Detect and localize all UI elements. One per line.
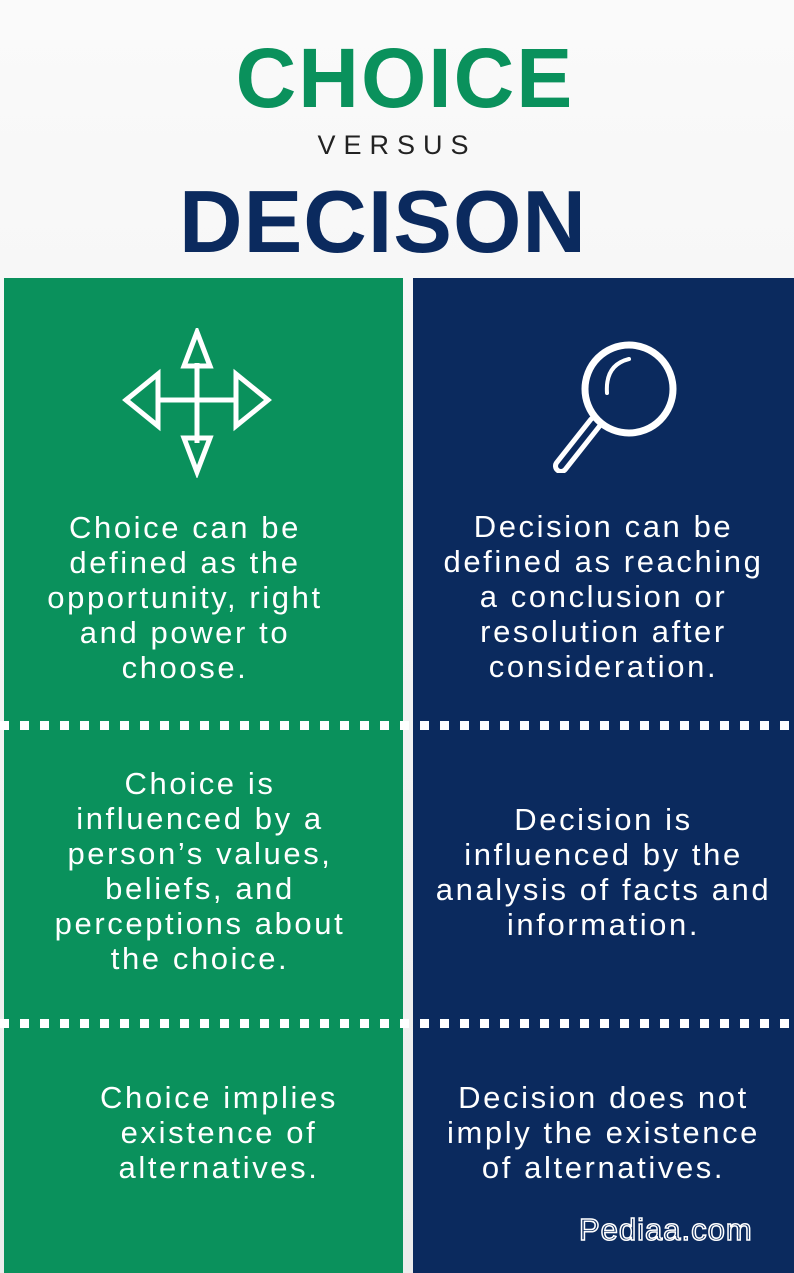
- title: DECISON: DECISON: [179, 172, 587, 271]
- text: choice definition: Choice can be: [69, 510, 301, 545]
- text: decision influence: Decision is: [514, 802, 693, 837]
- text: choice alternatives: Choice implies: [100, 1080, 338, 1115]
- text: decision influence: information.: [507, 907, 700, 942]
- text: choice influence: influenced by a: [76, 801, 324, 836]
- text: decision alternatives: Decision does not: [458, 1080, 749, 1115]
- text: choice definition: defined as the: [69, 545, 301, 580]
- text: decision influence: analysis of facts and: [436, 872, 771, 907]
- text: choice definition: [47, 510, 323, 685]
- text: choice influence: the choice.: [111, 941, 289, 976]
- text: decision definition: [444, 509, 763, 684]
- text: choice influence: Choice is: [125, 766, 275, 801]
- text: decision influence: influenced by the: [464, 837, 743, 872]
- text: decision definition: consideration.: [489, 649, 718, 684]
- logo: Pediaa.com: Pediaa.com: [579, 1212, 753, 1247]
- text: choice influence: [55, 766, 345, 976]
- text: decision alternatives: imply the existence: [447, 1115, 760, 1150]
- icon: magnifying glass: [553, 342, 676, 473]
- subtitle: VERSUS: VERSUS: [317, 130, 477, 160]
- panel: choice: [4, 278, 403, 1273]
- text: decision influence: [436, 802, 771, 942]
- text: decision definition: defined as reaching: [444, 544, 763, 579]
- text: choice influence: perceptions about: [55, 906, 345, 941]
- text: choice alternatives: existence of: [121, 1115, 317, 1150]
- text: decision definition: Decision can be: [474, 509, 733, 544]
- text: decision definition: a conclusion or: [480, 579, 727, 614]
- text: decision definition: resolution after: [480, 614, 727, 649]
- text: choice definition: choose.: [122, 650, 248, 685]
- title: CHOICE: CHOICE: [236, 31, 574, 125]
- text: choice definition: and power to: [80, 615, 290, 650]
- text: choice influence: beliefs, and: [105, 871, 295, 906]
- icon: four arrows: [122, 328, 272, 478]
- text: decision alternatives: [447, 1080, 760, 1185]
- text: choice alternatives: alternatives.: [119, 1150, 319, 1185]
- panel: decision: [413, 278, 794, 1273]
- text: choice alternatives: [100, 1080, 338, 1185]
- text: choice influence: person’s values,: [67, 836, 333, 871]
- text: choice definition: opportunity, right: [47, 580, 323, 615]
- text: decision alternatives: of alternatives.: [482, 1150, 725, 1185]
